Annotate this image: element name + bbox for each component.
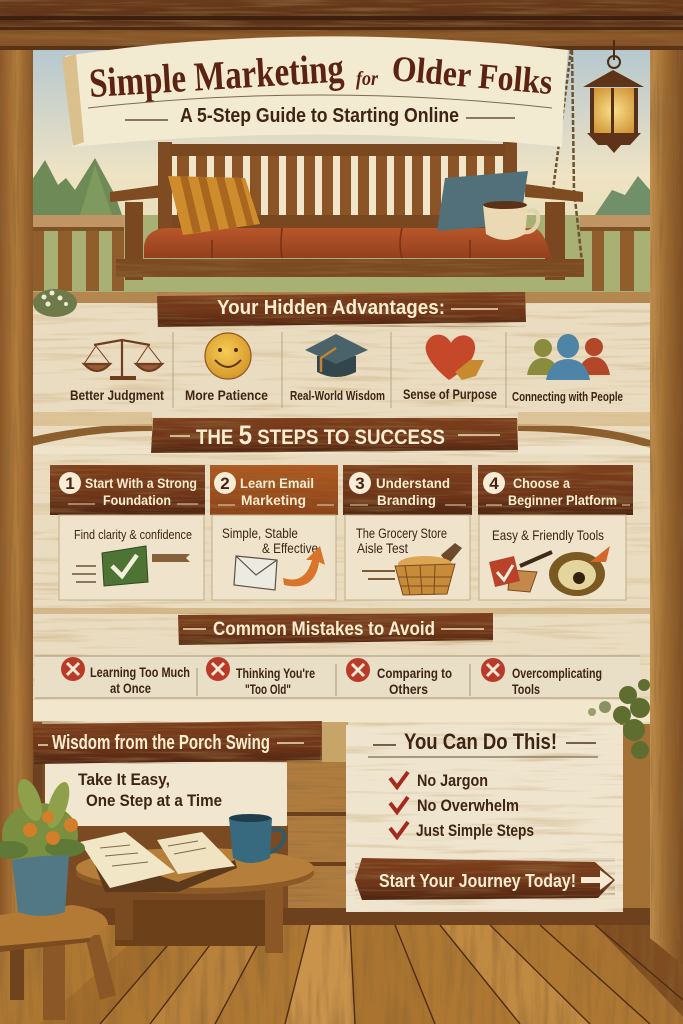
step 3 body: The Grocery Store	[356, 526, 447, 541]
mistake 2	[206, 657, 315, 697]
vase	[12, 855, 69, 916]
mistake 2: "Too Old"	[245, 681, 291, 697]
panel: wisdom from the porch swing	[33, 721, 322, 826]
mistake 4: Tools	[512, 681, 540, 697]
background: sky scene	[32, 50, 652, 300]
potted plant	[0, 776, 85, 916]
icon: heart with hand	[426, 335, 484, 380]
step 3 header: Branding	[377, 492, 436, 508]
mistake 1	[61, 657, 190, 696]
arm right	[525, 184, 583, 202]
leaves	[0, 776, 85, 867]
step 3 header: Understand	[376, 475, 450, 491]
step 4 header: Choose a	[513, 475, 570, 491]
call to action button: Start Your Journey Today!	[379, 871, 576, 891]
small white flowers	[33, 289, 77, 317]
step 2 header: 2	[220, 474, 230, 493]
heading: common mistakes	[178, 613, 493, 645]
title banner	[62, 36, 568, 147]
swing chain	[553, 50, 582, 262]
mistake 2: Thinking You're	[236, 665, 315, 681]
step 1 header: Start With a Strong	[85, 475, 197, 491]
heading: your hidden advantages	[157, 292, 526, 327]
just simple steps	[390, 821, 534, 840]
title: for	[356, 68, 378, 90]
advantage: sense of purpose: Sense of Purpose	[403, 386, 497, 402]
mistake 3: Comparing to	[377, 665, 452, 681]
title: Simple Marketing	[88, 44, 345, 106]
step 1 body: Find clarity & confidence	[74, 528, 192, 542]
step 1 header	[50, 465, 205, 515]
step 3 header: 3	[355, 474, 365, 493]
title: Older Folks	[390, 48, 554, 102]
stool	[0, 905, 116, 1020]
step 2 body: & Effective	[262, 540, 318, 556]
mistake 4	[481, 658, 602, 697]
cushions	[144, 228, 551, 258]
call to action button	[355, 858, 615, 900]
subtitle: A 5-Step Guide to Starting Online	[180, 105, 459, 127]
mistake 1: Learning Too Much	[90, 664, 190, 680]
mistake 1: at Once	[110, 680, 151, 696]
porch railing	[32, 215, 650, 304]
step 4 header: 4	[489, 474, 499, 493]
porch swing	[110, 142, 584, 280]
icon: smiley	[205, 333, 251, 379]
no overwhelm: No Overwhelm	[417, 796, 519, 815]
open book	[80, 832, 237, 892]
blue pillow	[437, 171, 528, 231]
icon: grocery basket	[362, 543, 462, 595]
wooden floor	[0, 925, 683, 1024]
frame: right post	[650, 50, 683, 965]
arm left	[110, 184, 168, 202]
step 3 body	[345, 515, 470, 600]
lantern	[583, 40, 644, 153]
step 3 card	[343, 465, 472, 600]
advantage: connecting with people	[512, 334, 623, 404]
step 4 card	[478, 465, 633, 600]
main plank board	[32, 303, 650, 725]
step 4 body	[479, 515, 626, 600]
icon: green check	[72, 546, 190, 586]
trees right	[595, 176, 650, 215]
note board	[45, 762, 287, 826]
heading: the 5 steps to success: THE 5 STEPS TO SUCCESS	[196, 420, 445, 450]
heading: the 5 steps to success	[151, 418, 518, 453]
coffee cup	[483, 201, 538, 240]
no jargon	[390, 771, 488, 790]
step 2 card	[210, 465, 338, 600]
icon: friendly tools	[489, 546, 610, 596]
flowers	[23, 811, 78, 845]
step 1 header: Foundation	[103, 492, 171, 508]
mistake 3: Others	[389, 681, 428, 697]
no overwhelm	[390, 796, 519, 815]
panel: common mistakes	[35, 656, 640, 698]
step 2 body: Simple, Stable	[222, 525, 298, 541]
blue mug	[229, 814, 284, 863]
step 1 header: 1	[65, 474, 75, 493]
advantage: better judgment: Better Judgment	[70, 387, 164, 403]
advantage: real-world wisdom	[290, 334, 385, 403]
heading: You Can Do This!	[404, 729, 557, 754]
quote text: Take It Easy,	[78, 770, 170, 789]
step 2 header: Marketing	[241, 492, 306, 508]
step 4 header	[478, 465, 633, 515]
step 4 header: Beginner Platform	[508, 492, 617, 508]
icon: graduation cap	[305, 334, 368, 377]
checklist	[390, 771, 534, 840]
just simple steps: Just Simple Steps	[416, 821, 534, 840]
striped pillow	[168, 176, 260, 235]
step 2 body	[212, 515, 336, 600]
step 2 header: Learn Email	[240, 475, 314, 491]
advantage: more patience: More Patience	[185, 387, 268, 403]
mistake 4: Overcomplicating	[512, 665, 602, 681]
icon: scales	[84, 339, 162, 378]
icon: people	[527, 334, 610, 380]
panel: hidden advantages	[70, 332, 623, 408]
wisdom heading	[33, 721, 322, 764]
side table	[76, 848, 314, 953]
advantage: sense of purpose	[403, 335, 497, 402]
quote text: One Step at a Time	[86, 791, 222, 810]
advantage: better judgment	[70, 339, 164, 403]
lower wood wall	[32, 722, 650, 926]
climbing plant	[588, 679, 650, 759]
mistake 3	[346, 658, 452, 697]
frame: top beam	[0, 0, 683, 50]
step 4 body: Easy & Friendly Tools	[492, 527, 604, 543]
step 1 card	[50, 465, 205, 600]
quote text	[78, 770, 222, 810]
frame: left post	[0, 50, 33, 925]
icon: envelope and arrow	[234, 546, 325, 590]
back slats opening	[172, 155, 504, 230]
step 2 header	[210, 465, 338, 515]
advantage: more patience	[185, 333, 268, 403]
no jargon: No Jargon	[417, 771, 488, 790]
seat base	[116, 259, 584, 277]
panel: you can do this	[346, 725, 623, 912]
advantage: connecting with people: Connecting with People	[512, 389, 623, 404]
title	[88, 44, 554, 106]
heading: common mistakes: Common Mistakes to Avoid	[213, 619, 435, 640]
step 1 body	[59, 515, 204, 600]
advantage: real-world wisdom: Real-World Wisdom	[290, 388, 385, 403]
arrow	[581, 870, 613, 890]
step 3 body: Aisle Test	[357, 541, 408, 556]
heading: your hidden advantages: Your Hidden Advantages:	[217, 297, 445, 319]
trees left	[32, 158, 122, 215]
wisdom heading: Wisdom from the Porch Swing	[52, 732, 270, 754]
step 3 header	[343, 465, 472, 515]
